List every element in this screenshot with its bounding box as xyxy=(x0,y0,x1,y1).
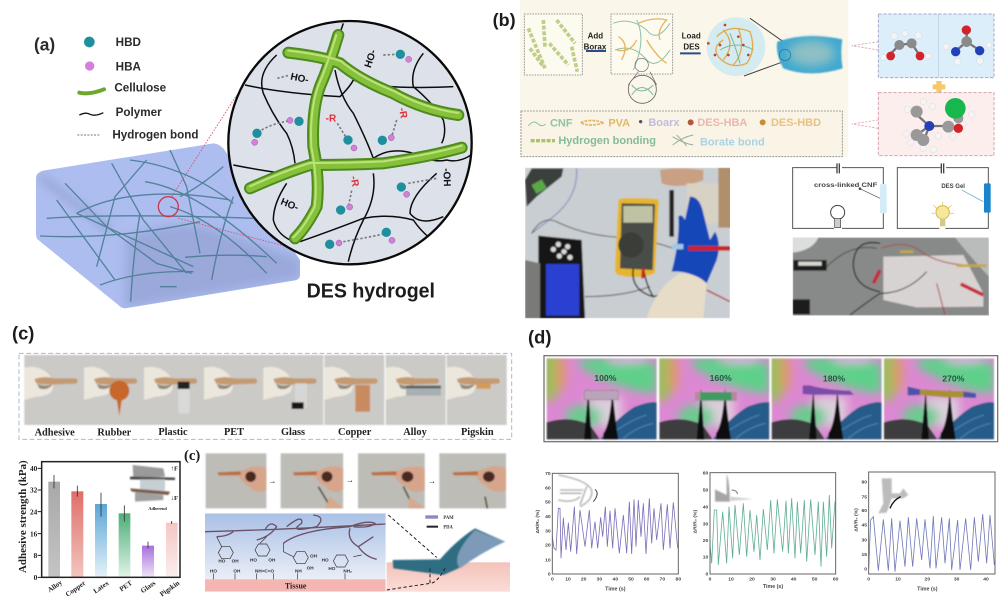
schematic: tissue adhesion: HO xyxy=(210,569,217,574)
schematic: tissue adhesion: OH xyxy=(268,557,276,562)
schematic: tissue adhesion: NH xyxy=(295,569,302,574)
photo sequence: finger peeling: → xyxy=(346,476,354,485)
line chart: finger bending: 50 xyxy=(628,577,634,583)
magnified circle: -R xyxy=(348,175,360,188)
photo sequence: finger peeling xyxy=(206,453,506,508)
line chart: wrist bending: 50 xyxy=(812,577,818,583)
photo sequence: finger peeling: → xyxy=(428,476,436,485)
magnified circle xyxy=(228,21,473,264)
scheme background xyxy=(520,0,848,157)
schematic: tissue adhesion: OH xyxy=(310,553,318,558)
DES hydrogel caption: DES hydrogel xyxy=(307,280,435,302)
schematic: tissue adhesion: OH xyxy=(232,559,239,564)
line chart: wrist bending: 30 xyxy=(770,577,776,583)
arrow add borax: Borax xyxy=(584,42,607,51)
line chart: leg bending: 20 xyxy=(925,577,930,583)
line chart: finger bending xyxy=(535,471,681,592)
schematic: tissue adhesion: HO xyxy=(322,557,329,562)
dashed frame with adhesion photos: Adhesive xyxy=(35,427,75,438)
line chart: finger bending: 50 xyxy=(545,500,551,506)
line chart: wrist bending: 60 xyxy=(833,577,839,583)
arrow add borax: Add xyxy=(588,31,603,40)
line chart: leg bending: 40 xyxy=(983,577,989,583)
line chart: wrist bending: 0 xyxy=(709,577,712,583)
bar chart: adhesive strength: ↓F xyxy=(171,495,178,502)
circuit: cross-linked CNF: cross-linked CNF xyxy=(814,182,877,189)
bar chart: adhesive strength: 8 xyxy=(34,551,38,560)
line chart: wrist bending: 10 xyxy=(703,555,709,561)
line chart: finger bending: Time (s) xyxy=(605,586,626,592)
bar chart: adhesive strength: 16 xyxy=(30,529,38,538)
dashed frame with adhesion photos: Glass xyxy=(281,427,305,438)
arrow load DES xyxy=(680,31,701,53)
line chart: wrist bending: 0 xyxy=(706,572,709,578)
schematic: tissue adhesion: HO xyxy=(250,557,257,562)
line chart: finger bending: 10 xyxy=(565,577,571,583)
photo: battery circuit xyxy=(793,237,989,316)
legend: Cellulose xyxy=(114,82,167,95)
HBA molecule box xyxy=(852,93,994,156)
bar chart: adhesive strength: 40 xyxy=(30,464,38,473)
CNF box xyxy=(524,14,582,75)
legend: HBD xyxy=(116,36,141,49)
schematic: tissue adhesion: HO xyxy=(328,566,336,571)
stretching photos: 180% xyxy=(823,373,845,383)
dashed frame with adhesion photos: Pigskin xyxy=(461,427,494,438)
label a: (a) xyxy=(34,35,55,55)
line chart: finger bending: 60 xyxy=(545,485,551,491)
line chart: finger bending: 30 xyxy=(597,577,602,583)
circuit: cross-linked CNF xyxy=(793,163,887,228)
line chart: leg bending xyxy=(853,472,995,592)
panel: a xyxy=(34,21,473,308)
line chart: wrist bending xyxy=(693,470,839,590)
schematic: tissue adhesion: Tissue xyxy=(285,581,307,590)
schematic: patch on skin: PAM xyxy=(443,516,454,521)
line chart: wrist bending: 50 xyxy=(703,487,709,493)
bar chart: adhesive strength: Adhesive strength (kPa) xyxy=(17,460,29,573)
line chart: leg bending: 10 xyxy=(895,577,901,583)
legend box: PVA xyxy=(608,118,630,130)
schematic: tissue adhesion: NH=C=O xyxy=(255,569,275,574)
line chart: leg bending: 0 xyxy=(864,567,867,573)
legend box: DES-HBD xyxy=(771,117,821,129)
bar chart: adhesive strength: 24 xyxy=(30,507,38,516)
crosslinked box xyxy=(611,14,673,103)
legend box: CNF xyxy=(550,118,573,130)
legend box: Hydrogen bonding xyxy=(558,135,656,147)
line chart: leg bending: Time (s) xyxy=(917,586,938,592)
line chart: leg bending: 15 xyxy=(861,552,867,558)
stretching photos xyxy=(535,348,998,442)
line chart: finger bending: 70 xyxy=(545,471,551,477)
magnified circle: -R xyxy=(326,114,336,125)
line chart: wrist bending: ΔR/R₀ (%) xyxy=(693,510,699,533)
dashed frame with adhesion photos: Alloy xyxy=(403,427,428,438)
line chart: leg bending: 75 xyxy=(861,494,867,500)
magnified circle: HO- xyxy=(279,197,300,214)
legend box: Borate bond xyxy=(700,137,765,149)
line chart: wrist bending: 40 xyxy=(791,577,797,583)
bar chart: adhesive strength: Copper xyxy=(64,579,87,599)
stretching photos: 270% xyxy=(942,374,965,384)
schematic: tissue adhesion xyxy=(205,513,386,592)
bar chart: adhesive strength: Adherend xyxy=(148,506,167,511)
label b: (b) xyxy=(493,10,516,30)
magnified circle: HO- xyxy=(363,48,379,69)
line chart: finger bending: 0 xyxy=(551,577,554,583)
stretching photos: 100% xyxy=(594,373,617,383)
magnified circle: HO- xyxy=(289,72,310,86)
bar chart: adhesive strength xyxy=(17,460,181,599)
line chart: leg bending: 30 xyxy=(861,537,867,543)
line chart: finger bending: 40 xyxy=(545,514,551,520)
bar chart: adhesive strength: Latex xyxy=(92,579,111,595)
line chart: wrist bending: 20 xyxy=(703,538,709,544)
dashed frame with adhesion photos: PET xyxy=(224,427,244,438)
legend: Hydrogen bond xyxy=(112,129,198,142)
line chart: finger bending: 60 xyxy=(644,577,650,583)
gel sphere xyxy=(707,17,783,76)
bar chart: adhesive strength: ↑F xyxy=(171,466,178,473)
arrow load DES: DES xyxy=(683,42,700,51)
line chart: leg bending: ΔR/R₀ (%) xyxy=(853,508,859,532)
line chart: finger bending: 0 xyxy=(548,572,551,578)
schematic: patch on skin: PDA xyxy=(443,525,454,530)
plus sign xyxy=(933,81,945,93)
dashed frame with adhesion photos: Copper xyxy=(338,427,372,438)
circuit: DES gel xyxy=(897,163,991,228)
stretching photos: 160% xyxy=(710,373,732,383)
label d: (d) xyxy=(528,326,551,347)
line chart: finger bending: 10 xyxy=(545,557,551,563)
panel: c xyxy=(12,322,512,599)
schematic: tissue adhesion: HO xyxy=(218,559,226,564)
bar chart: adhesive strength: PET xyxy=(118,579,134,593)
dashed frame with adhesion photos xyxy=(19,353,512,439)
panel: d xyxy=(528,326,998,592)
dashed frame with adhesion photos: Rubber xyxy=(97,427,132,438)
bar chart: adhesive strength: Pigskin xyxy=(158,579,181,598)
legend box: DES-HBA xyxy=(697,117,747,129)
schematic: patch on skin xyxy=(387,515,510,592)
bar chart: adhesive strength: 0 xyxy=(34,573,38,582)
line chart: leg bending: 60 xyxy=(861,508,867,514)
line chart: wrist bending: 20 xyxy=(749,577,755,583)
circuit: DES gel: DES Gel xyxy=(941,184,965,190)
schematic: tissue adhesion: OH xyxy=(307,565,314,570)
line chart: finger bending: 80 xyxy=(676,577,681,583)
legend box xyxy=(521,111,842,157)
bar chart: adhesive strength: Alloy xyxy=(46,578,64,594)
line chart: leg bending: 0 xyxy=(867,577,870,583)
line chart: leg bending: 45 xyxy=(861,523,867,529)
line chart: finger bending: 20 xyxy=(581,577,587,583)
line chart: wrist bending: 60 xyxy=(703,470,709,476)
line chart: wrist bending: 10 xyxy=(728,577,734,583)
legend xyxy=(77,36,198,142)
line chart: finger bending: 70 xyxy=(660,577,665,583)
arrow add borax xyxy=(584,31,607,51)
HBD molecule box xyxy=(852,14,994,78)
legend: HBA xyxy=(116,61,142,74)
arrow load DES: Load xyxy=(682,31,701,40)
line chart: finger bending: 40 xyxy=(613,577,618,583)
photo: multimeter measurement xyxy=(525,168,732,318)
photo sequence: finger peeling: → xyxy=(268,476,276,485)
magnified circle: -R xyxy=(396,107,409,119)
schematic: tissue adhesion: OH xyxy=(233,569,241,574)
line chart: wrist bending: Time (s) xyxy=(763,584,783,590)
label c second: (c) xyxy=(184,448,200,464)
line chart: leg bending: 90 xyxy=(861,479,867,485)
panel: b xyxy=(493,0,994,318)
legend: Polymer xyxy=(116,106,162,119)
line chart: finger bending: ΔR/R₀ (%) xyxy=(535,510,541,533)
bar chart: adhesive strength: 32 xyxy=(30,486,38,495)
hydrogel block xyxy=(36,95,300,308)
line chart: finger bending: 20 xyxy=(545,543,551,549)
schematic: tissue adhesion: NH₂ xyxy=(343,569,352,574)
magnified circle: -OH xyxy=(440,168,452,187)
line chart: wrist bending: 30 xyxy=(703,521,709,527)
line chart: leg bending: 30 xyxy=(954,577,960,583)
bar chart: adhesive strength: Glass xyxy=(139,579,157,595)
hydrogel sample xyxy=(777,36,843,73)
legend box: Boarx xyxy=(648,117,680,129)
dashed frame with adhesion photos: Plastic xyxy=(158,427,188,438)
line chart: wrist bending: 40 xyxy=(703,504,709,510)
label c: (c) xyxy=(12,322,34,343)
line chart: finger bending: 30 xyxy=(545,528,551,534)
